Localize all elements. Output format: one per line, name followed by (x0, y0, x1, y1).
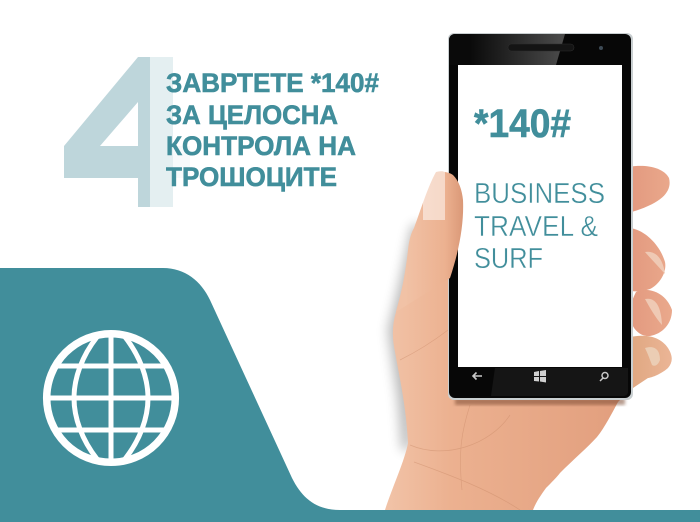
hand palm (385, 260, 640, 510)
icon: windows (534, 370, 546, 382)
finger 3 with nail (630, 290, 672, 336)
heading (166, 68, 379, 192)
finger 4 with nail (630, 336, 672, 390)
screen (458, 65, 622, 367)
teal background shape (0, 268, 700, 522)
tariff name on screen: BUSINESS (474, 178, 605, 210)
thumb (396, 172, 463, 312)
hand shadow (388, 225, 425, 450)
finger 1 (628, 166, 670, 213)
heading: ЗА ЦЕЛОСНА (166, 100, 338, 130)
phone (448, 33, 633, 400)
icon: search (600, 372, 608, 381)
phone face (449, 34, 631, 398)
large numeral 4 (64, 57, 190, 207)
phone shadow on palm (455, 398, 625, 405)
tariff name on screen: TRAVEL & (474, 211, 598, 243)
phone body (448, 33, 633, 400)
heading: ТРОШОЦИТЕ (166, 162, 337, 192)
bottom bar glare (491, 368, 628, 396)
heading: ЗАВРТЕТЕ *140# (166, 68, 379, 98)
icon: globe (47, 334, 175, 462)
tariff name on screen (474, 178, 605, 275)
tariff name on screen: SURF (474, 243, 543, 275)
icon: back arrow (473, 372, 482, 380)
code on screen: *140# (474, 102, 571, 146)
heading: КОНТРОЛА НА (166, 131, 356, 161)
speaker (508, 44, 574, 51)
camera (599, 46, 603, 50)
top glare (449, 34, 565, 65)
finger 2 with nail (630, 228, 665, 291)
palm creases (400, 330, 520, 510)
